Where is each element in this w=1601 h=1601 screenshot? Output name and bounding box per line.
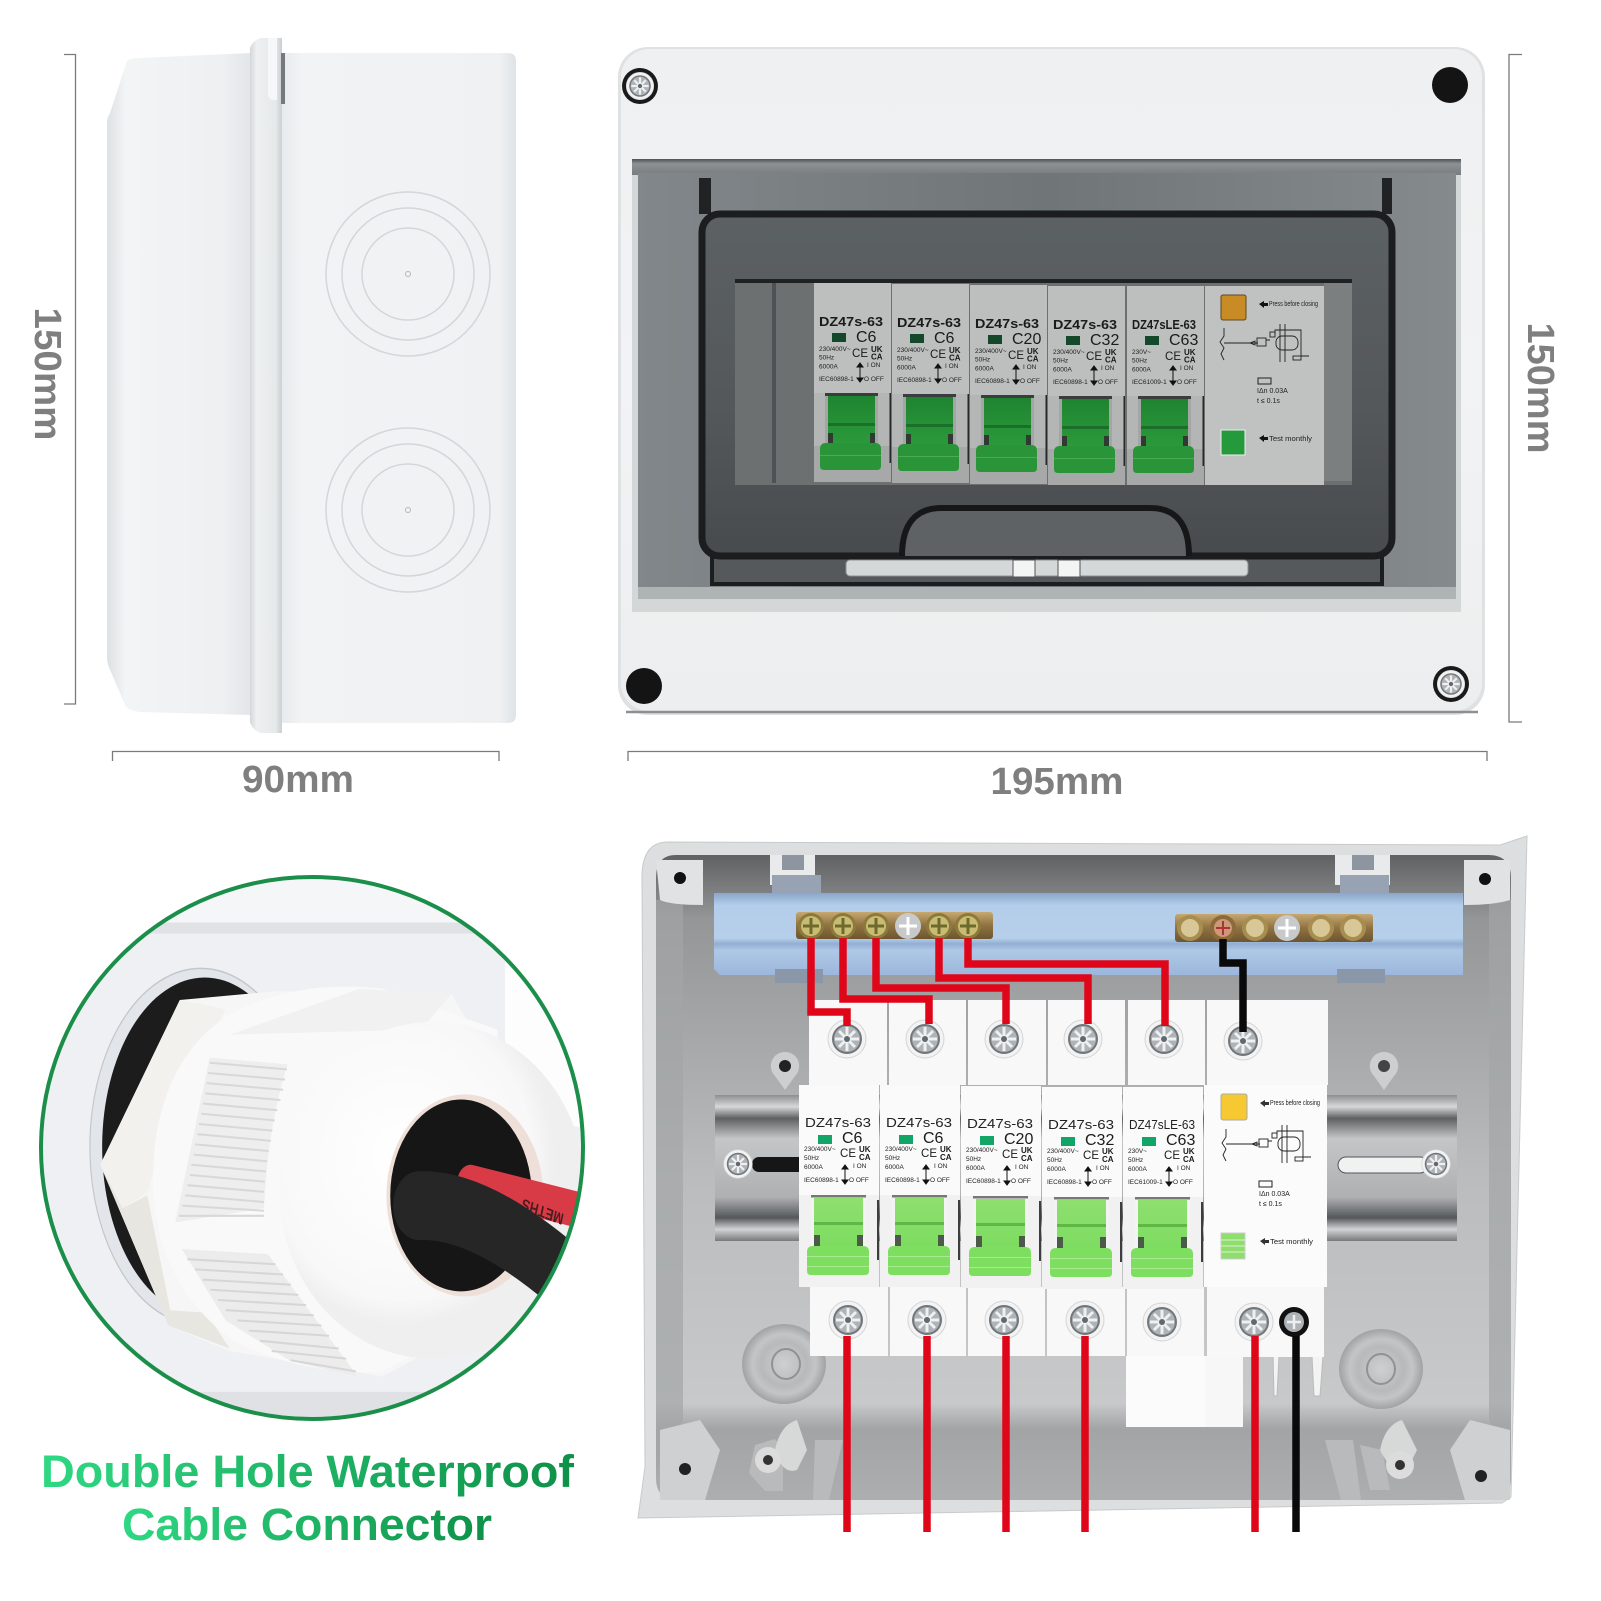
breaker: DZ47s-63 C6: [880, 1085, 960, 1287]
breaker: DZ47s-63 C32: 50Hz: [1053, 358, 1068, 364]
breaker: DZ47s-63 C20: 6000A: [966, 1165, 985, 1172]
dimension label: depth 90mm: 90mm: [242, 759, 354, 801]
red output wires: [847, 1336, 1255, 1532]
breaker: DZ47sLE-63 C63: C63: [1169, 332, 1198, 349]
breaker: DZ47s-63 C6: 50Hz: [897, 356, 912, 362]
breaker: DZ47sLE-63 C63: CE: [1165, 349, 1181, 363]
hinged cover: [702, 214, 1392, 584]
breaker: DZ47s-63 C6: 50Hz: [885, 1155, 900, 1162]
breaker: DZ47s-63 C32: C32: [1090, 332, 1119, 349]
lower terminal blocks: [810, 1287, 1324, 1357]
breaker: DZ47sLE-63 C63: C63: [1166, 1132, 1195, 1149]
breaker: DZ47s-63 C20: CE: [1002, 1147, 1018, 1161]
breaker: DZ47sLE-63 C63: DZ47sLE-63: [1132, 318, 1196, 332]
breaker: DZ47s-63 C6: O OFF: [930, 1177, 950, 1184]
breaker: DZ47s-63 C6: IEC60898-1: [885, 1177, 920, 1184]
breaker: DZ47sLE-63 C63: 50Hz: [1128, 1157, 1143, 1164]
dimension line: side height: [64, 54, 76, 704]
upper terminal screws: [828, 1020, 1262, 1060]
terminal bar: neutral: [1175, 914, 1373, 942]
breaker: DZ47s-63 C20: O OFF: [1011, 1178, 1031, 1185]
breaker: DZ47s-63 C32: 230/400V~: [1047, 1148, 1079, 1155]
breaker: DZ47s-63 C6: IEC60898-1: [804, 1177, 839, 1184]
breaker: DZ47sLE-63 C63: O OFF: [1177, 379, 1197, 386]
breaker: DZ47s-63 C6: O OFF: [942, 377, 962, 384]
breaker: DZ47s-63 C6: O OFF: [864, 376, 884, 383]
caption: Double Hole Waterproof Cable Connector: [41, 1446, 575, 1550]
upper terminal blocks: [809, 1000, 1328, 1085]
breaker: DZ47s-63 C6: CE: [840, 1146, 856, 1160]
breaker: DZ47sLE-63 C63: I ON: [1180, 365, 1194, 372]
caption: Double Hole Waterproof Cable Connector: Double Hole Waterproof: [41, 1446, 575, 1497]
residual current device: t ≤ 0.1s: [1259, 1201, 1282, 1208]
breaker: DZ47s-63 C20: CA: [1021, 1154, 1033, 1163]
breaker: DZ47s-63 C6: O OFF: [849, 1177, 869, 1184]
breaker: DZ47s-63 C6: [814, 283, 891, 482]
breaker: DZ47s-63 C6: UK: [871, 345, 883, 354]
breaker: DZ47s-63 C20: I ON: [1023, 364, 1037, 371]
residual current device: Test monthly: [1270, 1239, 1314, 1246]
enclosure base section: [278, 53, 516, 723]
breaker: DZ47s-63 C6: 230/400V~: [804, 1146, 836, 1153]
breaker: DZ47s-63 C32: [1048, 286, 1125, 485]
breaker: DZ47s-63 C20: CE: [1008, 348, 1024, 362]
breaker recess: [735, 279, 1352, 485]
panel: front view of enclosure: [618, 47, 1561, 803]
screw: bottom right: [1433, 666, 1469, 702]
gland photo illustration: METHS: [520, 1194, 565, 1227]
enclosure lid section: [107, 53, 250, 715]
breaker: DZ47s-63 C6: 230/400V~: [897, 347, 929, 354]
breaker: DZ47s-63 C6: [799, 1085, 879, 1287]
breaker: DZ47s-63 C32: 6000A: [1053, 366, 1072, 374]
breaker: DZ47sLE-63 C63: I ON: [1177, 1165, 1191, 1172]
breaker: DZ47s-63 C6: 230/400V~: [885, 1146, 917, 1153]
breaker: DZ47s-63 C32: CA: [1102, 1155, 1114, 1164]
breaker: DZ47s-63 C20: I ON: [1015, 1164, 1029, 1171]
screw hole: bottom left: [626, 668, 662, 704]
breaker: DZ47s-63 C20: UK: [1021, 1146, 1033, 1155]
breaker: DZ47s-63 C6: CA: [940, 1153, 952, 1162]
breaker: DZ47s-63 C32: O OFF: [1092, 1179, 1112, 1186]
breaker: DZ47sLE-63 C63: CE: [1164, 1148, 1180, 1162]
corner post: bottom left: [660, 1420, 720, 1500]
breaker: DZ47s-63 C6: [892, 284, 969, 483]
enclosure interior: [656, 855, 1511, 1500]
breaker: DZ47s-63 C6: I ON: [867, 362, 881, 369]
breaker: DZ47s-63 C6: C6: [934, 330, 955, 347]
inner floor clips: right: [1325, 1420, 1417, 1500]
breaker: DZ47s-63 C6: IEC60898-1: [819, 376, 854, 383]
screw hole: top right: [1432, 67, 1468, 103]
lower breaker extension: [1126, 1356, 1323, 1427]
breaker: DZ47s-63 C32: IEC60898-1: [1053, 379, 1088, 386]
breaker: DZ47s-63 C6: UK: [940, 1145, 952, 1154]
mounting tab: right: [1370, 1052, 1398, 1090]
breaker: DZ47s-63 C32: CE: [1083, 1148, 1099, 1162]
breaker: DZ47s-63 C6: CE: [921, 1146, 937, 1160]
breaker: DZ47s-63 C32: CA: [1105, 356, 1117, 364]
breaker: DZ47sLE-63 C63: [1127, 286, 1204, 485]
breaker: DZ47sLE-63 C63: IEC61009-1: [1132, 379, 1167, 386]
dimension label: side height 150mm: 150mm: [26, 308, 68, 440]
breaker: DZ47sLE-63 C63: CA: [1184, 356, 1196, 364]
lower terminal screws: [829, 1301, 1309, 1341]
gland circle outline: [41, 877, 583, 1419]
sealing band: [250, 38, 285, 733]
breaker: DZ47s-63 C6: I ON: [945, 363, 959, 370]
breaker: DZ47s-63 C20: C20: [1012, 331, 1041, 348]
residual current device: [1205, 286, 1324, 485]
breaker: DZ47s-63 C6: UK: [949, 346, 961, 355]
black output wire: [1292, 1336, 1300, 1532]
breaker: DZ47s-63 C20: 6000A: [975, 366, 994, 372]
breaker: DZ47s-63 C32: 230/400V~: [1053, 349, 1085, 356]
breaker: DZ47s-63 C6: I ON: [934, 1163, 948, 1170]
breaker: DZ47s-63 C6: CA: [859, 1153, 871, 1162]
caption: Double Hole Waterproof Cable Connector: Cable Connector: [122, 1499, 492, 1550]
breaker: DZ47sLE-63 C63: 230V~: [1132, 349, 1151, 356]
breaker: DZ47sLE-63 C63: UK: [1184, 348, 1196, 357]
breaker: DZ47s-63 C20: CA: [1027, 354, 1039, 364]
din rail: [715, 1095, 1457, 1241]
breaker: DZ47s-63 C20: [961, 1086, 1041, 1288]
breaker: DZ47s-63 C32: 6000A: [1047, 1166, 1066, 1173]
breaker: DZ47s-63 C6: CE: [930, 347, 946, 361]
dimension label: front height 150mm: 150mm: [1519, 322, 1561, 454]
enclosure base frame: [638, 836, 1527, 1518]
breaker: DZ47s-63 C6: CA: [949, 354, 961, 362]
breaker: DZ47s-63 C32: C32: [1085, 1132, 1114, 1149]
panel: side view of enclosure: [26, 38, 516, 801]
residual current device: Press before closing: [1270, 1100, 1320, 1107]
cable knockout grommet: left: [742, 1324, 826, 1404]
breaker: DZ47s-63 C20: IEC60898-1: [966, 1178, 1001, 1185]
breaker: DZ47s-63 C20: O OFF: [1020, 378, 1040, 385]
breaker: DZ47s-63 C32: UK: [1102, 1147, 1114, 1156]
breaker: DZ47sLE-63 C63: DZ47sLE-63: [1129, 1118, 1195, 1132]
breaker: DZ47s-63 C32: DZ47s-63: [1053, 318, 1117, 332]
breaker: DZ47s-63 C32: I ON: [1096, 1165, 1110, 1172]
breaker: DZ47sLE-63 C63: CA: [1183, 1155, 1195, 1164]
breaker: DZ47s-63 C32: [1042, 1087, 1122, 1289]
enclosure front shell: [618, 47, 1485, 715]
transparent window: [632, 159, 1461, 612]
breaker: DZ47s-63 C6: 6000A: [885, 1164, 904, 1171]
breaker: DZ47s-63 C32: 50Hz: [1047, 1157, 1062, 1164]
residual current device: IΔn 0.03A: [1257, 388, 1288, 395]
corner post: top right: [1464, 860, 1510, 905]
breaker: DZ47s-63 C6: 230/400V~: [819, 346, 851, 353]
residual current device: Test monthly: [1269, 436, 1313, 443]
breaker: DZ47s-63 C20: UK: [1027, 347, 1039, 356]
breaker: DZ47s-63 C20: 230/400V~: [975, 348, 1007, 355]
breaker: DZ47s-63 C32: UK: [1105, 348, 1117, 357]
breaker: DZ47s-63 C20: 50Hz: [966, 1156, 981, 1163]
breaker: DZ47s-63 C6: C6: [856, 329, 877, 346]
inner floor clips: left: [749, 1420, 843, 1500]
dimension line: width: [628, 752, 1487, 761]
corner post: top left: [656, 860, 703, 905]
dimension line: front height: [1509, 54, 1522, 722]
breaker: DZ47s-63 C32: DZ47s-63: [1048, 1118, 1114, 1132]
breaker: DZ47s-63 C6: DZ47s-63: [819, 315, 883, 329]
breaker: DZ47s-63 C6: DZ47s-63: [886, 1116, 952, 1130]
breaker: DZ47s-63 C6: 6000A: [819, 364, 838, 370]
breaker: DZ47s-63 C20: DZ47s-63: [967, 1117, 1033, 1131]
breaker: DZ47sLE-63 C63: UK: [1183, 1147, 1195, 1156]
breaker: DZ47s-63 C6: C6: [842, 1130, 863, 1147]
residual current device: IΔn 0.03A: [1259, 1191, 1290, 1198]
dimension line: depth: [112, 752, 499, 761]
dimension label: width 195mm: 195mm: [990, 761, 1124, 803]
breaker: DZ47s-63 C20: C20: [1004, 1131, 1033, 1148]
breaker: DZ47sLE-63 C63: 6000A: [1128, 1166, 1147, 1173]
breaker: DZ47s-63 C32: O OFF: [1098, 379, 1118, 386]
knockout: upper: [326, 192, 490, 356]
breaker: DZ47s-63 C6: IEC60898-1: [897, 377, 932, 384]
breaker: DZ47s-63 C32: I ON: [1101, 365, 1115, 372]
breaker: DZ47sLE-63 C63: IEC61009-1: [1128, 1179, 1163, 1186]
breaker: DZ47sLE-63 C63: O OFF: [1173, 1179, 1193, 1186]
panel: inside view of enclosure with wiring: [638, 836, 1527, 1532]
black neutral wire: [1223, 939, 1243, 1032]
breaker: DZ47s-63 C32: IEC60898-1: [1047, 1179, 1082, 1186]
cable knockout grommet: right: [1339, 1329, 1423, 1409]
breaker: DZ47s-63 C6: C6: [923, 1130, 944, 1147]
breaker: DZ47sLE-63 C63: 6000A: [1132, 366, 1151, 374]
screw: top left: [622, 68, 658, 104]
knockout: lower: [326, 428, 490, 592]
breaker: DZ47s-63 C6: DZ47s-63: [897, 316, 961, 330]
breaker: DZ47s-63 C6: 50Hz: [819, 354, 834, 362]
breaker: DZ47s-63 C32: CE: [1086, 349, 1102, 363]
breaker: DZ47s-63 C6: CA: [871, 352, 883, 362]
breaker: DZ47s-63 C6: I ON: [853, 1163, 867, 1170]
breaker: DZ47sLE-63 C63: 230V~: [1128, 1148, 1147, 1155]
breaker: DZ47s-63 C20: DZ47s-63: [975, 317, 1039, 331]
breaker: DZ47s-63 C20: [970, 285, 1047, 484]
red wiring to breakers: [811, 938, 1165, 1026]
breaker: DZ47sLE-63 C63: [1123, 1087, 1203, 1289]
breaker: DZ47s-63 C6: 6000A: [897, 364, 916, 372]
blue mounting rail: [714, 893, 1463, 983]
panel: cable gland close-up: [34, 871, 593, 1550]
breaker: DZ47sLE-63 C63: 50Hz: [1132, 358, 1147, 364]
mounting tab: left: [771, 1052, 799, 1090]
breaker: DZ47s-63 C6: 6000A: [804, 1164, 823, 1171]
breaker: DZ47s-63 C6: DZ47s-63: [805, 1116, 871, 1130]
breaker: DZ47s-63 C20: 230/400V~: [966, 1147, 998, 1154]
breaker: DZ47s-63 C20: IEC60898-1: [975, 378, 1010, 385]
gland photo illustration: [34, 871, 593, 1422]
breaker: DZ47s-63 C20: 50Hz: [975, 356, 990, 364]
interior side walls: [656, 900, 1511, 1470]
breaker: DZ47s-63 C6: UK: [859, 1145, 871, 1154]
rail clips upper: left: [770, 855, 821, 901]
rail clips upper: right: [1335, 855, 1390, 901]
residual current device: [1204, 1085, 1327, 1287]
terminal bar: live: [796, 912, 993, 939]
residual current device: t ≤ 0.1s: [1257, 398, 1280, 405]
breaker: DZ47s-63 C6: 50Hz: [804, 1155, 819, 1162]
residual current device: Press before closing: [1269, 301, 1318, 308]
breaker: DZ47s-63 C6: CE: [852, 346, 868, 360]
corner post: bottom right: [1450, 1420, 1510, 1500]
